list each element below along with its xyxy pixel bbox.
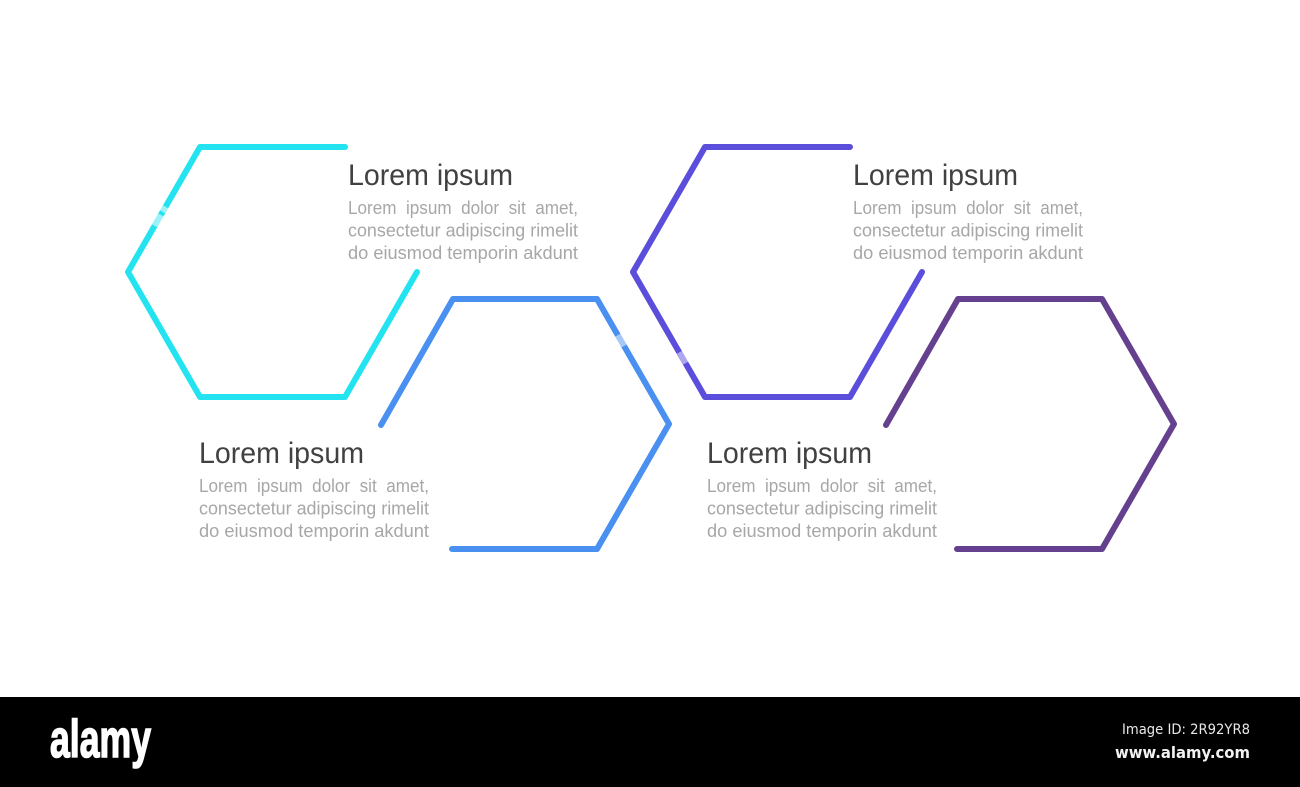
icon: blue open hexagon [381,299,669,549]
text block: step 2: consectetur adipiscing rimelit [199,498,429,518]
text block: step 1: consectetur adipiscing rimelit [348,220,578,240]
text block: step 3: Lorem ipsum dolor sit amet, [853,198,1083,218]
logo: alamy: alamy [50,710,151,769]
text block: step 1: do eiusmod temporin akdunt [348,243,578,263]
panel: step 4 purple [707,299,1174,549]
text block: step 4: do eiusmod temporin akdunt [707,521,937,541]
text block: step 3: consectetur adipiscing rimelit [853,220,1083,240]
heading: step 3: Lorem ipsum [853,159,1018,192]
text block: step 4: Lorem ipsum dolor sit amet, [707,476,937,496]
text block: step 2 [199,476,429,541]
text block: step 4 [707,476,937,541]
text block: step 4: consectetur adipiscing rimelit [707,498,937,518]
text block: step 1 [348,198,578,263]
text block: step 1: Lorem ipsum dolor sit amet, [348,198,578,218]
image id: Image ID: 2R92YR8 [1122,722,1250,738]
heading: step 4: Lorem ipsum [707,437,872,470]
website: www.alamy.com [1115,743,1250,762]
panel: step 3 indigo [633,147,1083,397]
heading: step 1: Lorem ipsum [348,159,513,192]
footer bar [0,697,1300,787]
icon: purple open hexagon [886,299,1174,549]
text block: step 2: Lorem ipsum dolor sit amet, [199,476,429,496]
icon: cyan open hexagon [128,147,417,397]
text block: step 2: do eiusmod temporin akdunt [199,521,429,541]
icon: indigo open hexagon [633,147,922,397]
heading: step 2: Lorem ipsum [199,437,364,470]
panel: step 1 cyan [128,147,578,397]
panel: step 2 blue [199,299,669,549]
text block: step 3 [853,198,1083,263]
text block: step 3: do eiusmod temporin akdunt [853,243,1083,263]
